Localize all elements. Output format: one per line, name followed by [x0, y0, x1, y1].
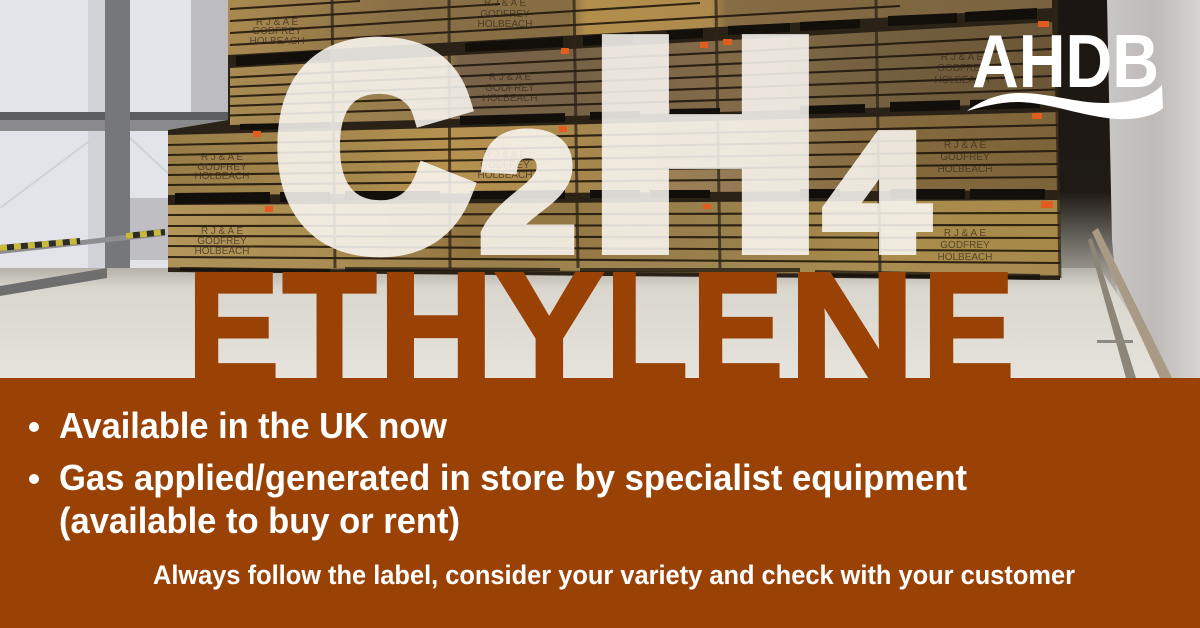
- floor: [0, 268, 1172, 378]
- stencil lettering: GODFREY: [937, 63, 987, 74]
- word: ETHYLENE: [188, 239, 1014, 417]
- bottom panel: [0, 378, 1200, 628]
- stencil lettering: HOLBEACH: [482, 93, 538, 104]
- word: ETHYLENE: T: [283, 240, 376, 416]
- stencil lettering: HOLBEACH: [194, 171, 250, 182]
- word: ETHYLENE: E: [922, 241, 1014, 417]
- orange stickers: [253, 21, 1053, 212]
- bullet: gas applied: Gas applied/generated in store by specialist equipment: [59, 457, 967, 498]
- photo background: warehouse store: [0, 0, 1200, 378]
- stencil lettering: HOLBEACH: [249, 36, 305, 47]
- stencil lettering: HOLBEACH: [934, 75, 990, 86]
- chemical formula: C2H4: [279, 0, 927, 307]
- bullet: available: Available in the UK now: [59, 405, 448, 446]
- logo wordmark: AHDB: [972, 19, 1159, 103]
- stencil lettering: GODFREY: [197, 162, 247, 173]
- stencil lettering: HOLBEACH: [937, 164, 993, 175]
- bullet list: [29, 405, 967, 541]
- footer note: Always follow the label, consider your variety and check with your customer: [153, 560, 1075, 590]
- dark gap and right wall: [1050, 0, 1200, 378]
- stencil lettering: GODFREY: [940, 152, 990, 163]
- stencil lettering: R J & A E: [201, 226, 243, 237]
- potato crates: [168, 0, 1060, 280]
- chemical formula: C2H4: C: [279, 0, 468, 300]
- word: ETHYLENE: N: [788, 241, 915, 417]
- posts: [332, 0, 1060, 278]
- word: ETHYLENE: E: [188, 241, 279, 417]
- stencil lettering: R J & A E: [944, 140, 986, 151]
- stencil lettering: GODFREY: [252, 26, 302, 37]
- base planks: [168, 257, 1060, 276]
- stencil lettering: GODFREY: [480, 9, 530, 20]
- stencil lettering: GODFREY: [480, 160, 530, 171]
- chemical formula: C2H4: 4: [826, 100, 927, 284]
- handrail: [1088, 228, 1172, 378]
- stencil lettering: GODFREY: [940, 240, 990, 251]
- stencil lettering: HOLBEACH: [194, 246, 250, 257]
- word: ETHYLENE: E: [692, 241, 783, 417]
- left wall: [0, 0, 240, 290]
- stencil lettering: R J & A E: [256, 17, 298, 28]
- bullet: gas applied: [29, 457, 967, 541]
- slats: [168, 1, 1060, 263]
- pallet gaps: [175, 8, 1045, 280]
- stencil lettering: [194, 0, 993, 263]
- bullet: gas applied: (available to buy or rent): [59, 500, 460, 541]
- word: ETHYLENE: H: [378, 239, 494, 417]
- logo swoosh: [967, 85, 1163, 119]
- stencil lettering: GODFREY: [485, 83, 535, 94]
- chemical formula: C2H4: 2: [481, 101, 575, 284]
- stencil lettering: R J & A E: [941, 52, 983, 63]
- stencil lettering: R J & A E: [201, 152, 243, 163]
- word: ETHYLENE: L: [606, 240, 688, 417]
- stencil lettering: HOLBEACH: [937, 252, 993, 263]
- stencil lettering: R J & A E: [484, 150, 526, 161]
- stencil lettering: HOLBEACH: [477, 170, 533, 181]
- word: ETHYLENE: Y: [495, 240, 604, 416]
- stencil lettering: R J & A E: [489, 72, 531, 83]
- AHDB logo: [967, 19, 1163, 119]
- stencil lettering: R J & A E: [944, 228, 986, 239]
- stencil lettering: GODFREY: [197, 236, 247, 247]
- stencil lettering: HOLBEACH: [477, 19, 533, 30]
